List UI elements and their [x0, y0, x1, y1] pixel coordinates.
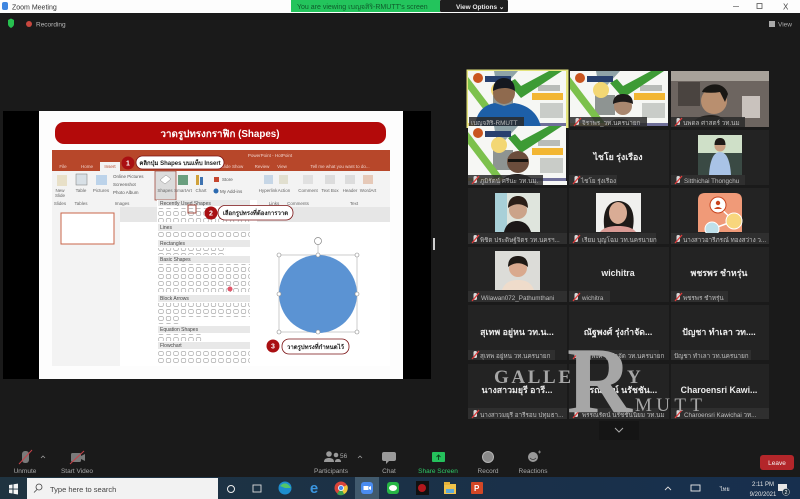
tile: participant 16: นางสาวมยุรี อารีรอบ ปทุมธา...	[480, 411, 564, 419]
powerpoint window: Slides	[54, 201, 67, 206]
system tray: 2:11 PM	[752, 482, 774, 488]
powerpoint window: Tables	[74, 201, 88, 206]
powerpoint window: Screenshot	[113, 182, 137, 187]
tile: participant 17	[569, 364, 669, 419]
powerpoint window: Chart	[195, 188, 207, 193]
slide title bar: วาดรูปทรงกราฟิก (Shapes)	[160, 128, 280, 141]
recording status	[8, 18, 66, 28]
tile: participant 15	[671, 305, 769, 360]
toolbar: participants	[314, 451, 362, 475]
powerpoint window: SmartArt	[174, 188, 193, 193]
toolbar: unmute: Unmute	[14, 468, 37, 475]
tile: participant 13	[468, 305, 567, 360]
window title bar: X	[783, 2, 789, 12]
tile: Charoensri Kawichai	[671, 364, 769, 419]
watermark: GALLE	[494, 367, 571, 388]
tile: participant 16: นางสาวมยุรี อารี...	[482, 385, 552, 396]
toolbar: unmute	[14, 450, 45, 475]
tile: participant 3	[671, 71, 769, 127]
toolbar: reactions	[519, 450, 548, 475]
callout 3: 3	[271, 344, 275, 350]
toolbar: start video	[61, 451, 93, 475]
tile: participant 9	[671, 188, 769, 244]
callout 2: 2	[209, 210, 213, 218]
shapes gallery menu: Rectangles	[160, 241, 186, 247]
tile: participant 4	[468, 126, 567, 185]
toolbar: participants: 56	[340, 453, 348, 460]
powerpoint window: Text	[350, 201, 359, 206]
splitter handle	[433, 238, 435, 250]
screen-share banner: View Options ⌄	[456, 4, 504, 11]
callout 1: 1	[126, 160, 130, 168]
callout 3: วาดรูปทรงที่กำหนดไว้	[287, 342, 345, 352]
callout 3	[266, 339, 349, 354]
shapes gallery menu: Flowchart	[160, 343, 182, 349]
tile: participant 12: พชรพร ชำหรุ่น	[683, 295, 724, 302]
watermark: R	[567, 329, 633, 433]
powerpoint window: Online Pictures	[113, 174, 144, 179]
system tray	[665, 482, 790, 498]
powerpoint window: Comment	[298, 188, 318, 193]
tile: presenter: เบญจสิริ-RMUTT	[471, 119, 518, 127]
tile: participant 13: สุเทพ อยู่หน วท.นครนายก	[480, 353, 551, 360]
callout 1: คลิกปุ่ม Shapes บนแท็บ Insert	[139, 158, 221, 167]
tile: participant 2	[570, 71, 668, 127]
toolbar: record	[478, 452, 499, 475]
screen-share banner: You are viewing เบญจสิริ-RMUTT's screen	[297, 3, 428, 11]
tile: wichitra: wichitra	[581, 295, 604, 302]
powerpoint window: Photo Album	[113, 190, 139, 195]
powerpoint window: Pictures	[93, 188, 110, 193]
powerpoint window: Hyperlink	[259, 188, 278, 193]
tile: participant 14	[569, 305, 669, 360]
powerpoint window: Review	[255, 164, 270, 169]
tile: participant 9: นางสาวอารีภรณ์ ทองสว่าง ว...	[683, 236, 766, 244]
tile: participant 4: ภูมิรัตน์ ศรีนะ วท.นม.	[480, 177, 539, 185]
toolbar: share screen	[418, 452, 458, 475]
powerpoint window: WordArt	[360, 188, 377, 193]
powerpoint window: Insert	[104, 164, 116, 169]
tile: Charoensri Kawichai: Charoensri Kawi...	[681, 385, 757, 395]
powerpoint window: File	[59, 164, 67, 169]
powerpoint window: View	[277, 164, 288, 169]
windows taskbar	[0, 477, 800, 499]
watermark	[494, 329, 702, 433]
tile: presenter	[466, 70, 568, 128]
window title bar	[0, 0, 800, 13]
tile: participant 17: พรรณรัตน์ นรัชชันนิยม วท.นม	[582, 411, 665, 419]
view button	[769, 21, 792, 28]
powerpoint window	[52, 150, 390, 366]
system tray: 9/20/2021	[750, 492, 777, 498]
powerpoint window: Links	[269, 201, 280, 206]
powerpoint window: Store	[222, 177, 233, 182]
powerpoint window: My Add-ins	[220, 189, 243, 194]
shapes gallery menu	[157, 200, 257, 365]
powerpoint window: Action	[278, 188, 291, 193]
powerpoint window: Header	[343, 188, 358, 193]
tile: participant 15: ปัญชา ทำเลา วท....	[682, 327, 756, 338]
tile: Charoensri Kawichai: Charoensri Kawichai วท...	[684, 412, 757, 419]
system tray: ไทย	[719, 486, 730, 493]
toolbar: chat	[382, 452, 396, 475]
taskbar app icons	[228, 477, 483, 499]
toolbar: chat: Chat	[382, 468, 396, 475]
toolbar: start video: Start Video	[61, 468, 93, 475]
shapes gallery menu: Lines	[160, 225, 172, 231]
watermark: MUTT	[635, 395, 702, 416]
tile: participant 2: จิราพร_วท.นครนายก	[582, 119, 641, 127]
callout 1	[122, 156, 224, 170]
start button	[9, 484, 18, 494]
tile: participant 14: ณัฐพงศ์ รุ่งกำจัด วท.นครนายก	[582, 352, 664, 360]
callout 2	[204, 206, 293, 220]
shapes gallery menu: Recently Used Shapes	[160, 201, 211, 207]
taskbar app icons: P	[474, 484, 480, 493]
search box: Type here to search	[50, 485, 116, 494]
blue circle shape with selection handles	[277, 238, 359, 334]
powerpoint window: Comments	[287, 201, 310, 206]
powerpoint window: Slide Show	[221, 164, 244, 169]
slide thumbnail	[61, 213, 114, 244]
shapes gallery menu: Equation Shapes	[160, 327, 199, 333]
window title bar: Zoom Meeting	[12, 4, 57, 12]
tile: participant 7: พิชิต ประดิษฐ์จิตร วท.นครฯ...	[480, 236, 560, 244]
powerpoint window: Shapes	[157, 188, 173, 193]
tile: participant 5: ไชโย รุ่งเรือง	[580, 177, 616, 185]
tile: participant 16	[468, 364, 567, 419]
tile: participant 8	[569, 188, 669, 244]
gallery next-page button	[599, 421, 639, 440]
tile: participant 17: พรรณรัตน์ นรัชชัน...	[579, 384, 657, 395]
powerpoint window: Tell me what you want to do...	[310, 164, 370, 169]
tile: participant 5	[569, 130, 669, 185]
toolbar: share screen: Share Screen	[418, 468, 458, 475]
tile: wichitra: wichitra	[600, 268, 635, 278]
tile: participant 12: พชรพร ชำหรุ่น	[691, 268, 747, 279]
view button: View	[778, 22, 792, 28]
tile: participant 15: ปัญชา ทำเลา วท.นครนายก	[674, 353, 749, 360]
leave button	[760, 455, 794, 470]
search box	[27, 478, 218, 499]
toolbar: participants: Participants	[314, 468, 349, 475]
powerpoint window: Text Box	[321, 188, 339, 193]
powerpoint window: PowerPoint - HotPoint	[248, 153, 293, 158]
powerpoint window: Table	[76, 188, 87, 193]
participant gallery	[466, 70, 769, 419]
shapes gallery menu: Block Arrows	[160, 296, 189, 302]
tile: wichitra	[569, 247, 669, 302]
screen-share banner	[291, 0, 508, 12]
powerpoint window: Home	[81, 164, 93, 169]
tile: Sitthichai Thongchu: Sitthichai Thongchu	[684, 178, 740, 185]
watermark: Y	[627, 367, 641, 388]
callout 2: เลือกรูปทรงที่ต้องการวาด	[223, 208, 288, 218]
tile: participant 5: ไชโย รุ่งเรือง	[592, 151, 643, 163]
taskbar app icons: e	[310, 480, 318, 497]
tile: Wilawan072_Pathumthani: Wilawan072_Pathumthani	[481, 295, 554, 302]
system tray: 2	[785, 490, 788, 496]
tile: Sitthichai Thongchu	[671, 130, 769, 185]
leave button: Leave	[768, 460, 786, 467]
tile: participant 13: สุเทพ อยู่หน วท.น...	[480, 327, 554, 338]
tile: Wilawan072_Pathumthani	[468, 247, 567, 302]
powerpoint window: Slide	[55, 193, 65, 198]
tile: participant 12	[671, 247, 769, 302]
powerpoint window: New	[55, 188, 65, 193]
toolbar: reactions: Reactions	[519, 468, 548, 475]
shapes gallery menu: Basic Shapes	[160, 257, 191, 263]
tile: participant 14: ณัฐพงศ์ รุ่งกำจัด...	[584, 326, 652, 338]
tile: participant 7	[468, 188, 567, 244]
toolbar: record: Record	[478, 468, 499, 475]
tile: participant 8: เรียม บุญโฉม วท.นครนายก	[582, 236, 657, 244]
recording status: Recording	[36, 22, 66, 28]
powerpoint window: Images	[115, 201, 130, 206]
slide title bar	[55, 122, 386, 144]
shared screen slide	[3, 111, 431, 379]
tile: participant 3: นพดล ศาสตร์ วท.นม	[683, 119, 740, 127]
